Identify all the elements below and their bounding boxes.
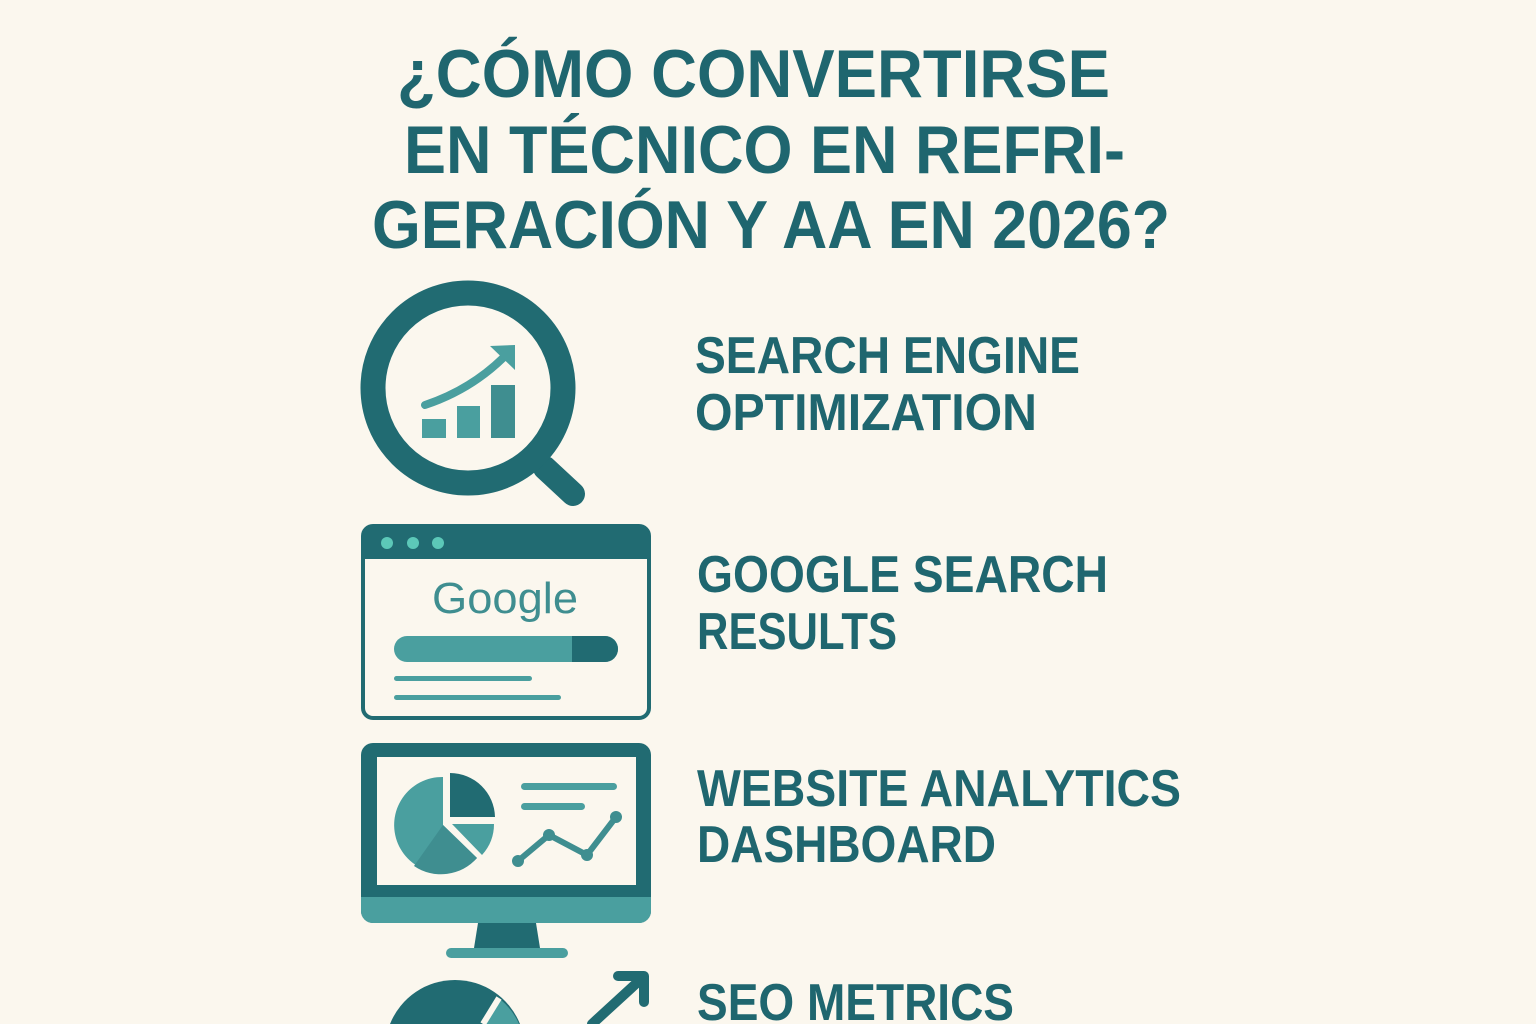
label: google search results: GOOGLE SEARCH — [697, 546, 1108, 604]
title: ¿CÓMO CONVERTIRSE — [397, 36, 1110, 112]
icon: magnifier with chart — [373, 293, 573, 494]
title: GERACIÓN Y AA EN 2026? — [372, 187, 1170, 263]
label: search engine optimization: OPTIMIZATION — [695, 384, 1037, 442]
label: website analytics dashboard: WEBSITE ANALYTICS — [697, 760, 1181, 818]
label: search engine optimization — [695, 327, 1080, 442]
icon: seo metrics pie and arrow — [390, 976, 644, 1024]
label: google search results — [697, 546, 1108, 661]
label: google search results: RESULTS — [697, 603, 897, 661]
icon: browser with google: Google — [432, 574, 578, 623]
label: search engine optimization: SEARCH ENGINE — [695, 327, 1080, 385]
title: EN TÉCNICO EN REFRI- — [404, 112, 1125, 188]
title — [372, 36, 1170, 263]
label: website analytics dashboard: DASHBOARD — [697, 816, 996, 874]
icon: browser with google — [363, 526, 649, 718]
label: website analytics dashboard — [697, 760, 1181, 874]
icon: analytics monitor — [361, 743, 651, 958]
